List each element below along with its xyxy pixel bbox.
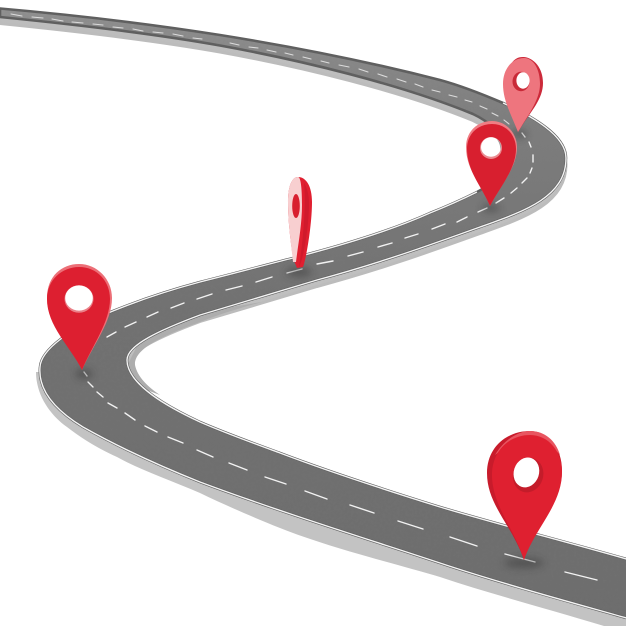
- pin hole: [512, 72, 530, 91]
- outer edge line: [40, 192, 626, 619]
- pin dark side stripe: [299, 183, 309, 267]
- pin: middle, edge-on: [288, 177, 312, 268]
- pin face: [47, 267, 110, 370]
- pin hole: [480, 137, 504, 159]
- pin rim: [466, 121, 517, 206]
- pin side: [288, 177, 312, 268]
- inner edge line: [127, 103, 626, 560]
- pin top highlight: [495, 431, 560, 455]
- pin face: [503, 58, 540, 132]
- pin hole: [64, 285, 94, 313]
- pin: bottom right: [487, 431, 562, 560]
- pin shadows on road: [75, 130, 544, 568]
- road curb: near outer wall: [36, 372, 626, 626]
- pin hole: [292, 194, 300, 218]
- pin: back right, pale: [503, 57, 543, 132]
- pin rim: [47, 264, 112, 370]
- pin rim: [487, 431, 562, 560]
- pin hole: [508, 454, 548, 496]
- pin: front right: [466, 121, 517, 206]
- road curb: inner bend wall: [120, 302, 262, 395]
- pin face: [288, 177, 302, 262]
- pin face: [467, 124, 516, 206]
- centre dashes: far section: [11, 14, 509, 124]
- centre dashes: near section: [84, 133, 597, 580]
- pin face: [492, 435, 562, 560]
- pin side: [508, 57, 543, 132]
- pin: left: [47, 264, 112, 370]
